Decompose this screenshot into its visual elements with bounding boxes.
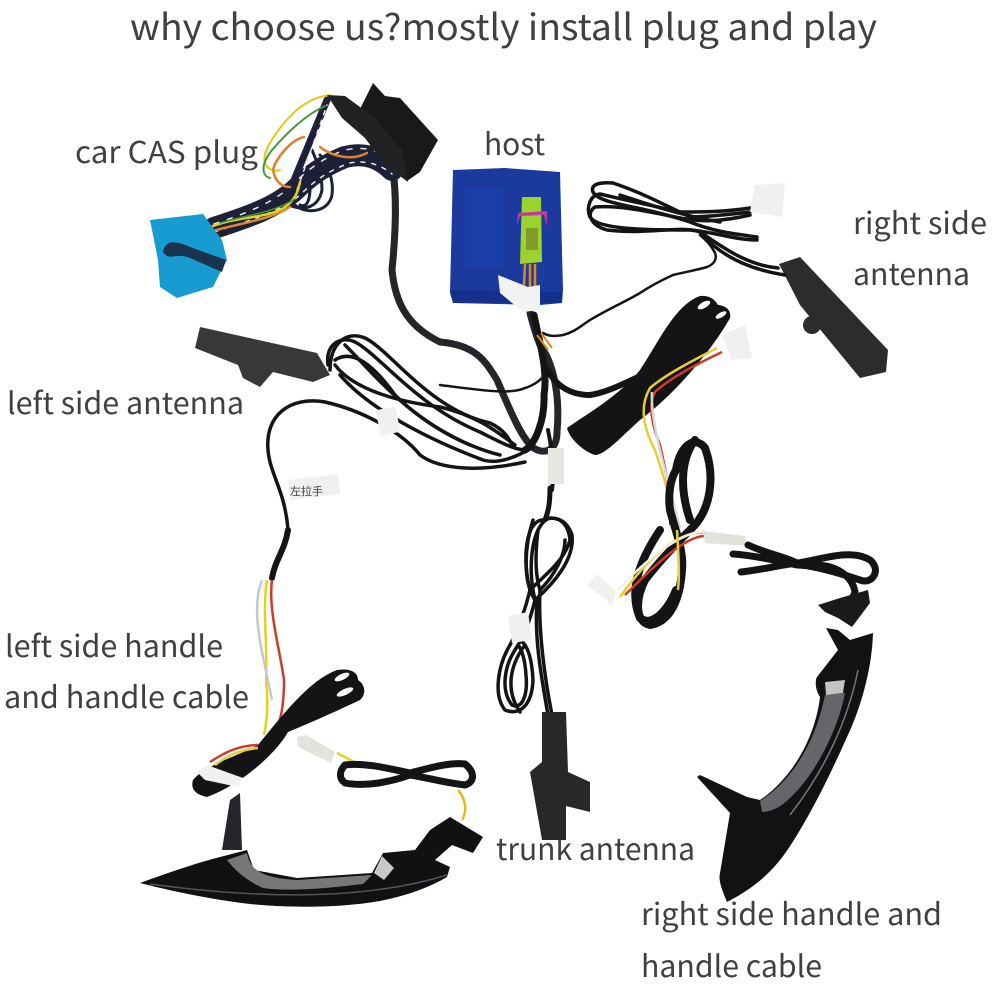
- label: right side antenna: [853, 199, 987, 294]
- label: left side handle and handle cable: and handle cable: [4, 673, 249, 717]
- label: right side handle and handle cable: [641, 890, 942, 986]
- magenta clip: [517, 211, 547, 226]
- left handle cable: 左拉手: [290, 483, 323, 499]
- mounting clip: [818, 590, 870, 627]
- blue plug: [150, 214, 227, 298]
- green connector: [520, 197, 542, 264]
- label: right side antenna: antenna: [853, 250, 970, 294]
- middle coiled harness: [567, 296, 875, 625]
- label: left side handle and handle cable: left side handle: [5, 622, 223, 666]
- speckled wire bundle: [213, 95, 392, 232]
- label: host: host: [484, 120, 545, 164]
- white label: [498, 275, 540, 312]
- label: car CAS plug: car CAS plug: [75, 128, 258, 172]
- right side antenna: [588, 183, 888, 378]
- left side antenna: [195, 327, 533, 461]
- label: right side handle and handle cable: handle cable: [641, 942, 822, 986]
- handle body: [697, 628, 873, 902]
- black sleeve: [327, 95, 408, 182]
- label: left side antenna: left side antenna: [7, 379, 244, 423]
- title: why choose us?mostly install plug and play: [130, 0, 877, 51]
- label: right side handle and handle cable: right side handle and: [641, 890, 942, 934]
- left handle cable: [192, 474, 472, 820]
- label: right side antenna: right side: [853, 199, 987, 243]
- host-side coloured wires: [537, 333, 552, 350]
- label: left side handle and handle cable: [4, 622, 249, 717]
- car CAS plug connector: [150, 83, 438, 298]
- black connector block: [352, 83, 438, 181]
- label: trunk antenna: trunk antenna: [496, 825, 695, 869]
- trunk antenna: [498, 448, 590, 840]
- central braided harness cables: [268, 140, 716, 530]
- coil mass: [192, 669, 364, 797]
- right door handle: [697, 590, 873, 902]
- plug strap: [163, 242, 226, 272]
- left door handle: [140, 793, 483, 907]
- host module: [450, 168, 563, 312]
- coil mass: [567, 296, 730, 455]
- cable label: [288, 474, 340, 500]
